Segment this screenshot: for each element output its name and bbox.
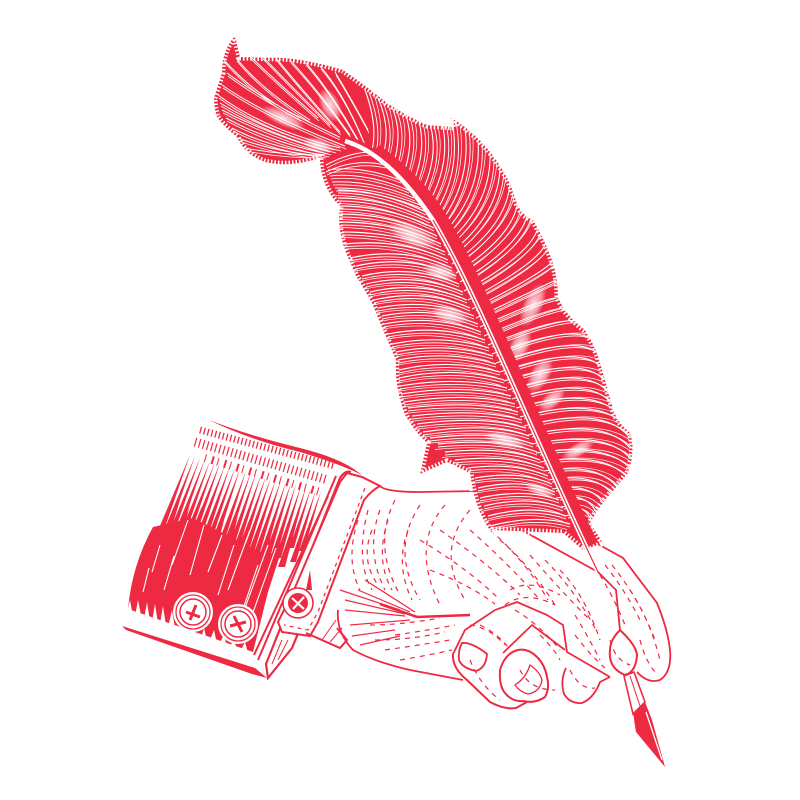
sleeve top dash rows xyxy=(200,430,335,466)
fingers lower outline xyxy=(453,654,527,708)
nib highlight xyxy=(646,712,662,760)
sleeve bottom edge xyxy=(122,626,267,678)
quill pen shaft xyxy=(624,672,665,767)
feather rachis dark band xyxy=(375,150,592,545)
button: sleeve right xyxy=(218,604,258,644)
sleeve hem fringe xyxy=(124,600,250,660)
finger nail xyxy=(459,643,487,671)
hand outline xyxy=(338,486,670,681)
shirt cuff xyxy=(278,473,380,648)
feather xyxy=(214,36,637,572)
sleeve solid shaded area xyxy=(128,518,280,652)
sleeve xyxy=(122,420,362,678)
sleeve top edge xyxy=(209,420,362,475)
nib xyxy=(633,702,665,767)
ring finger xyxy=(562,668,610,703)
feather barbs: right vane xyxy=(365,89,637,532)
hand stipple contours xyxy=(352,500,660,700)
thumb tip xyxy=(610,630,637,675)
sleeve white highlights xyxy=(143,520,276,638)
feather rachis xyxy=(345,141,598,572)
sleeve right fold xyxy=(266,472,351,678)
sleeve hatching fade xyxy=(146,455,321,576)
feather barbs: left vane xyxy=(335,190,570,532)
feather vane silhouette xyxy=(214,36,633,550)
middle finger xyxy=(500,650,548,702)
hand xyxy=(338,486,670,708)
feather serrated edge xyxy=(214,36,633,550)
feather highlights xyxy=(258,84,597,501)
feather barbs: tip xyxy=(218,56,421,208)
button: sleeve left xyxy=(173,592,213,632)
hand dark hatch xyxy=(340,580,415,645)
fingernail on middle finger xyxy=(515,665,542,694)
button: cuff xyxy=(283,570,313,618)
hand creases xyxy=(453,572,620,677)
cuff underside xyxy=(306,628,347,648)
cuff stitching xyxy=(284,488,365,630)
